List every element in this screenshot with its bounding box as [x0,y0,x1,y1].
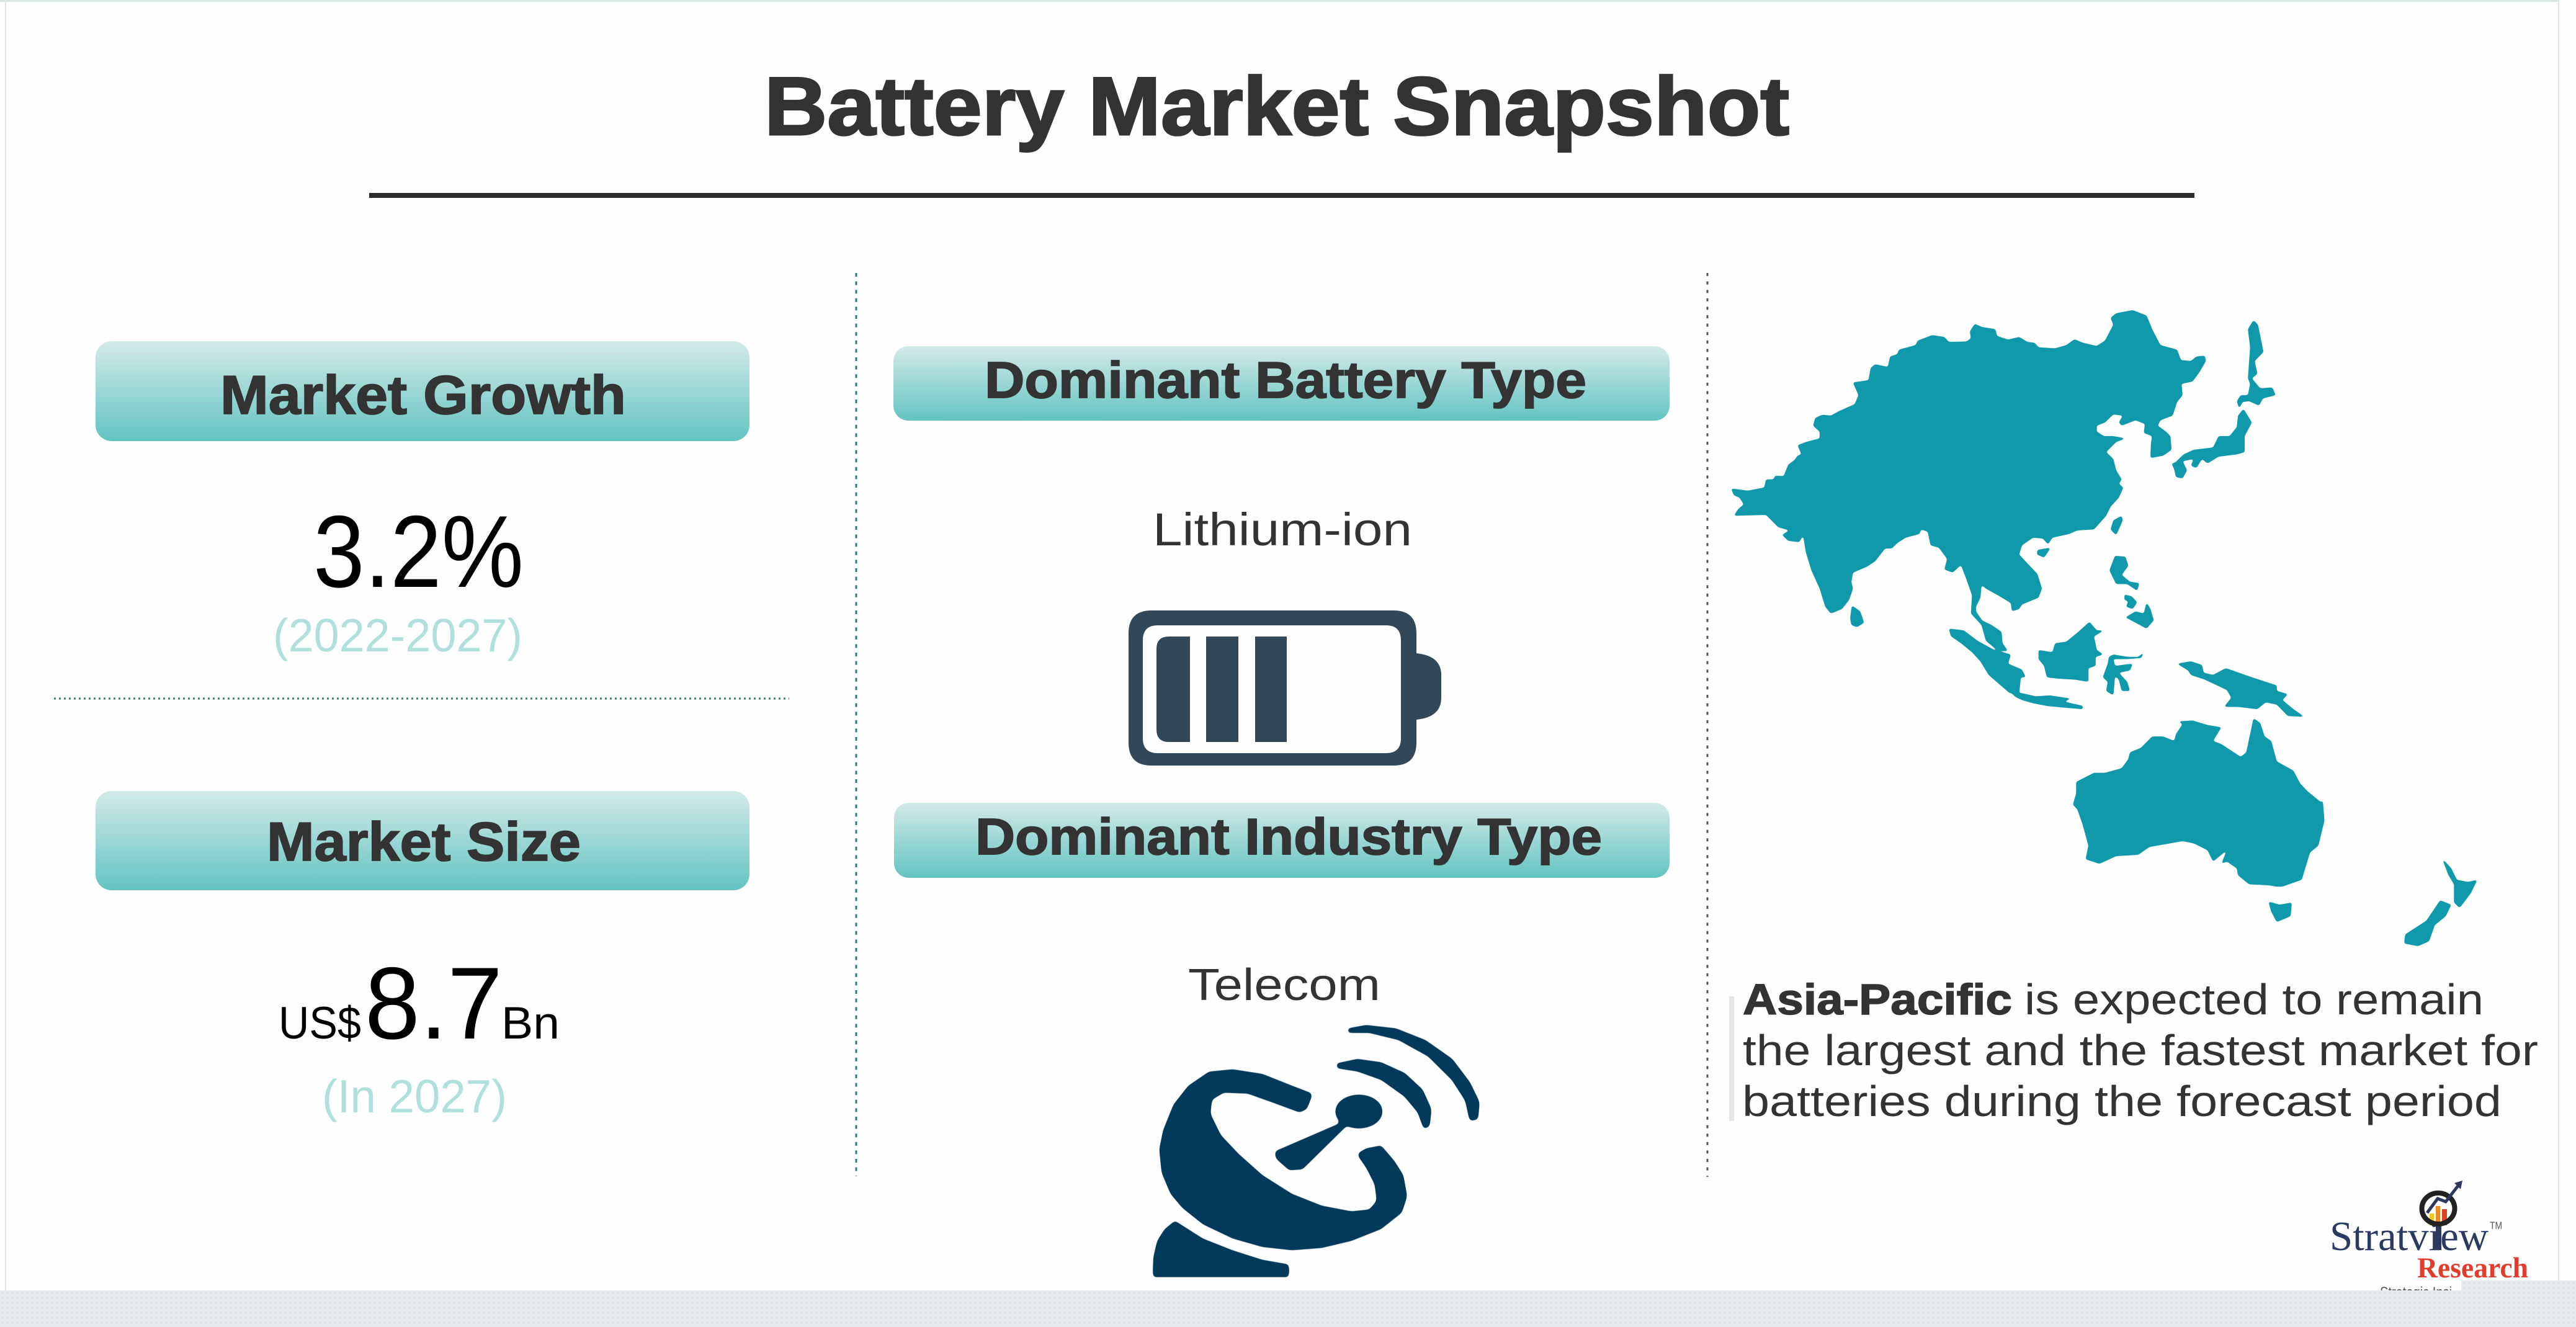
stat: market size value: US$ [279,998,361,1048]
stat: market size value: Bn [501,998,560,1048]
heading: dominant battery type: Dominant Battery Type [985,351,1586,409]
stat: growth period: (2022-2027) [273,609,522,661]
map: Asia-Pacific [1731,310,2477,946]
logo: Stratview Research: Research [2417,1252,2528,1284]
stat: market size value: 8.7 [365,946,503,1060]
logo: Stratview Research [2330,1181,2528,1301]
heading: dominant battery type [893,346,1670,421]
logo: Stratview Research: TM [2490,1220,2502,1231]
text block: Asia-Pacific outlook: Asia-Pacific [1743,975,2012,1024]
heading: market growth [96,341,749,441]
heading: market size: Market Size [267,811,581,872]
text block: Asia-Pacific outlook [1729,975,2538,1125]
panel: dominant types [893,346,1670,1277]
footer band [0,1280,2576,1327]
icon: satellite dish [1153,1025,1480,1277]
stat: market size value [279,946,560,1060]
icon: battery [1129,610,1441,766]
stat: market growth value: 3.2% [313,494,524,609]
text block: Asia-Pacific outlook: batteries during the forecast period [1742,1077,2502,1125]
logo: Stratview Research: Stratview [2330,1213,2489,1259]
label: lithium-ion: Lithium-ion [1153,504,1412,555]
title underline [369,193,2194,198]
heading: market growth: Market Growth [220,364,626,426]
text block: Asia-Pacific outlook: the largest and the fastest market for [1743,1026,2538,1075]
label: telecom: Telecom [1188,960,1380,1010]
heading: market size [96,791,749,890]
panel: market metrics [54,341,789,1122]
heading: dominant industry type [894,803,1670,878]
stat: market size year: (In 2027) [322,1070,507,1122]
title: Battery Market Snapshot [764,61,1789,153]
logo: Stratview Research: Strategic Insi [2380,1284,2452,1301]
panel: regional outlook [1729,310,2538,1125]
text block: Asia-Pacific outlook: is expected to remain [2024,975,2484,1024]
heading: dominant industry type: Dominant Industry Type [975,808,1602,865]
